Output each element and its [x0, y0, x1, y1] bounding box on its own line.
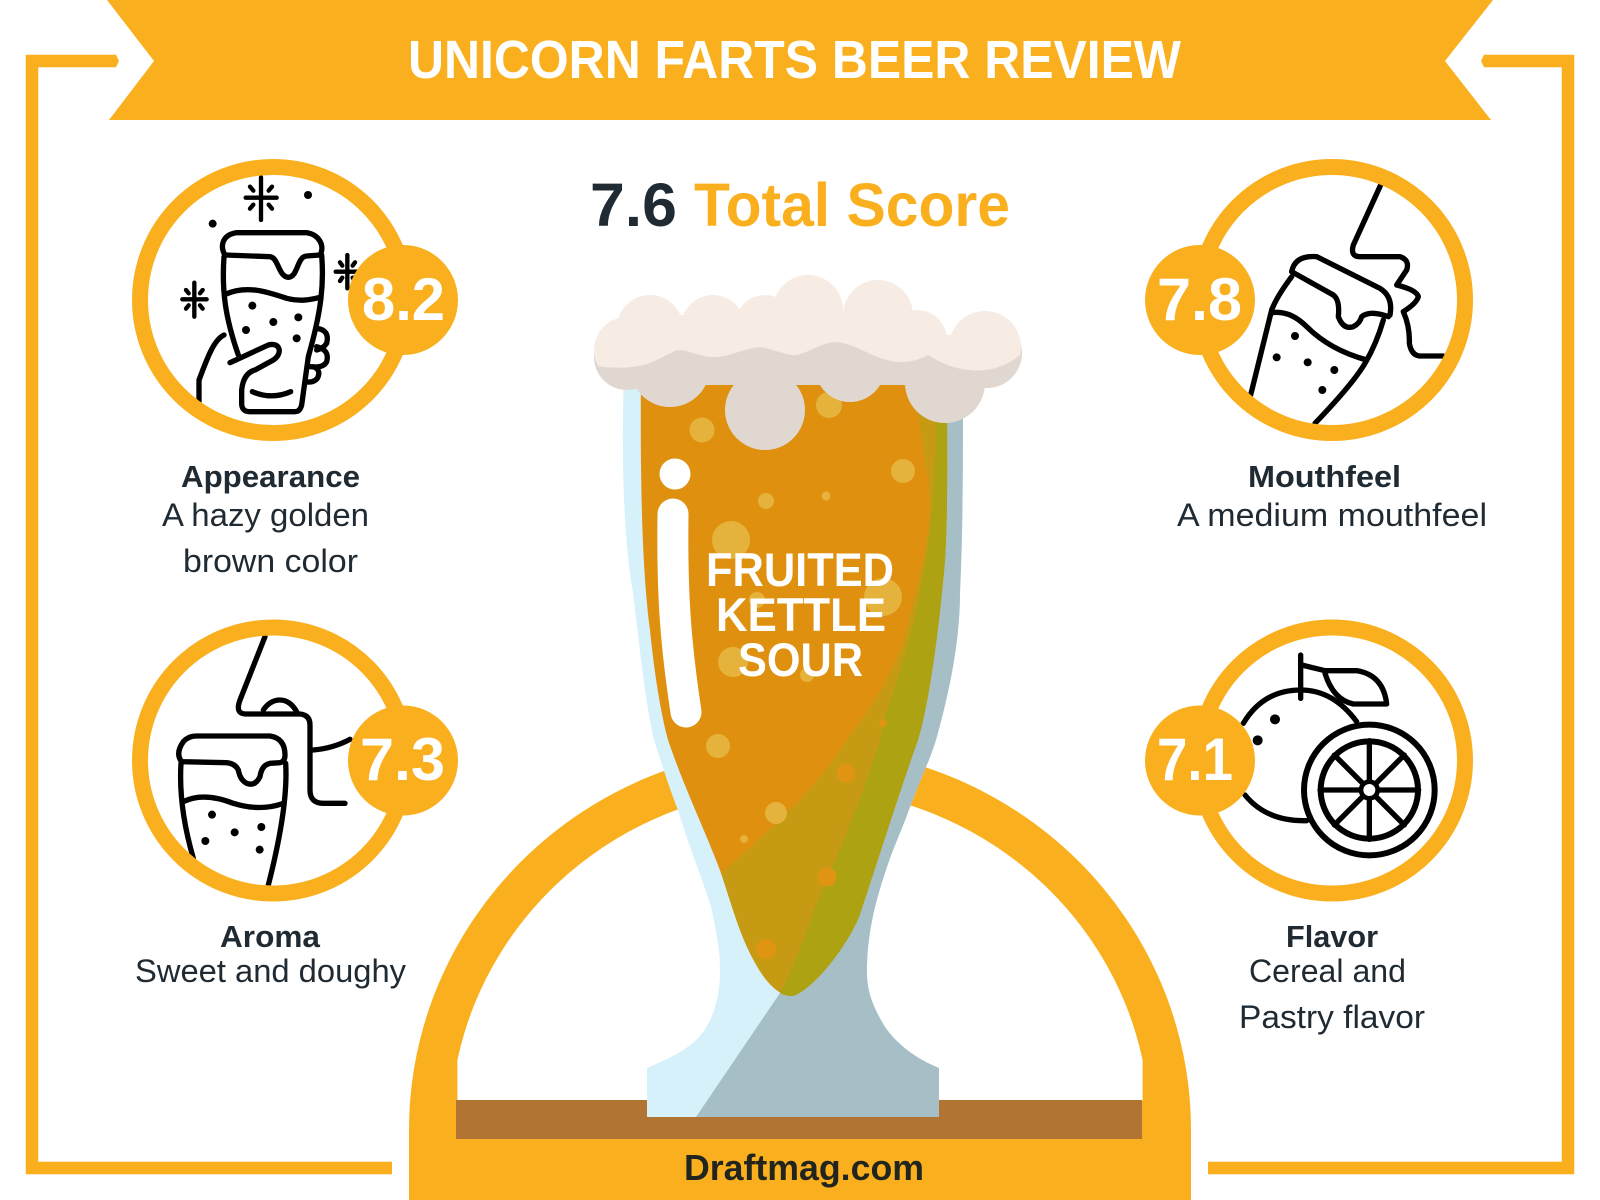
score badge: [348, 706, 458, 816]
icon: citrus fruit: [1243, 655, 1435, 855]
glass shadow: [696, 370, 963, 1117]
foam: [594, 275, 1022, 450]
source: Draftmag.com: [684, 1147, 924, 1188]
icon: hand holding beer: [182, 177, 360, 412]
title banner: [107, 0, 1493, 120]
ring: [1199, 628, 1465, 894]
total score heading: 7.6: [590, 171, 677, 239]
beer: [641, 370, 947, 996]
citrus slice: [1304, 725, 1435, 855]
icon: smelling beer: [179, 637, 350, 885]
appearance text: [162, 459, 369, 579]
score badge: 8.2: [362, 266, 445, 333]
score badge: 7.1: [1157, 726, 1233, 793]
appearance text: Appearance: [181, 459, 360, 494]
beer glass: [594, 275, 1022, 1117]
mouthfeel text: [1177, 459, 1487, 533]
ring: [140, 167, 406, 433]
bubbles: [690, 392, 915, 843]
orange bubbles: [756, 719, 887, 959]
panel: aroma: [135, 628, 458, 989]
aroma text: [135, 919, 406, 989]
mouthfeel text: A medium mouthfeel: [1177, 497, 1487, 533]
beer dark shade: [780, 370, 947, 996]
ring: [140, 628, 406, 894]
mouthfeel text: Mouthfeel: [1248, 459, 1401, 494]
aroma text: Aroma: [220, 919, 321, 954]
total score heading: Total Score: [694, 171, 1010, 239]
flavor text: [1239, 919, 1425, 1035]
flavor text: Flavor: [1286, 919, 1378, 954]
aroma text: Sweet and doughy: [135, 953, 406, 989]
arch base: [409, 747, 1191, 1200]
flavor text: Pastry flavor: [1239, 999, 1425, 1035]
panel: appearance: [140, 167, 458, 579]
beer style label: [706, 543, 894, 686]
score badge: [1145, 245, 1255, 355]
beer mid shade: [721, 370, 947, 996]
flavor text: Cereal and: [1249, 953, 1406, 989]
score badge: [1145, 706, 1255, 816]
panel: flavor: [1145, 628, 1465, 1035]
score badge: [348, 245, 458, 355]
ring: [1199, 167, 1465, 433]
glass highlight: [660, 458, 690, 712]
glass body: [623, 370, 963, 1117]
score badge: 7.3: [360, 726, 445, 793]
beer style label: SOUR: [738, 633, 863, 686]
appearance text: A hazy golden: [162, 497, 369, 533]
beer style label: KETTLE: [716, 588, 886, 641]
title: UNICORN FARTS BEER REVIEW: [408, 30, 1181, 90]
icon: sipping beer: [1251, 185, 1443, 423]
panel: mouthfeel: [1145, 167, 1487, 533]
score badge: 7.8: [1157, 266, 1242, 333]
appearance text: brown color: [183, 543, 358, 579]
beer style label: FRUITED: [706, 543, 894, 596]
